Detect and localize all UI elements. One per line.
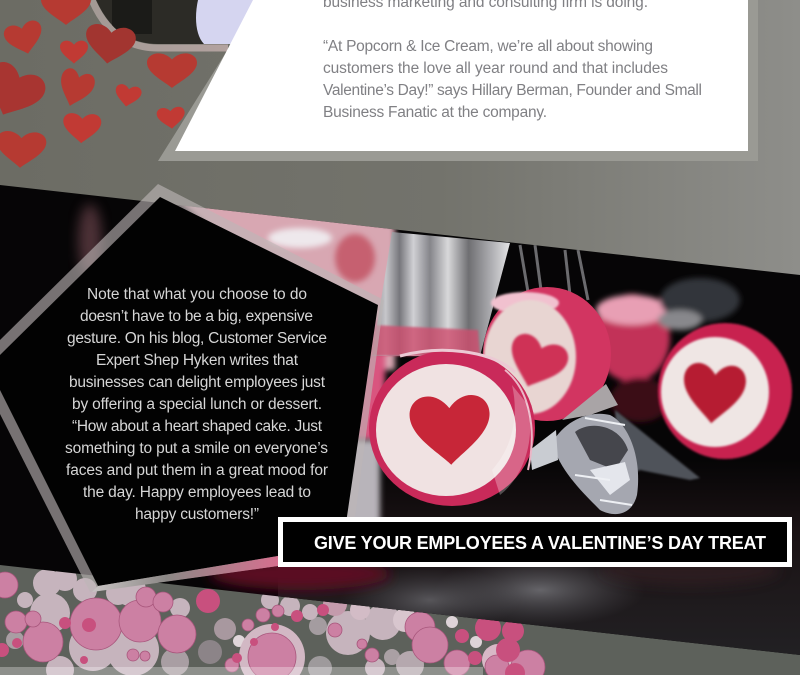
table surface (278, 489, 800, 655)
candy wrapper knot (530, 384, 700, 514)
blurred distant candy (594, 278, 740, 422)
body text: Note that what you choose to do (87, 286, 307, 303)
panel text: Business Fanatic at the company. (323, 104, 547, 121)
body text: Expert Shep Hyken writes that (96, 352, 299, 369)
body text: the day. Happy employees lead to (83, 484, 311, 501)
heart (113, 83, 142, 109)
banner heading: GIVE YOUR EMPLOYEES A VALENTINE’S DAY TREAT (314, 533, 766, 553)
pale strip along bottom (0, 667, 483, 675)
body text: “How about a heart shaped cake. Just (72, 418, 323, 435)
heart (60, 41, 88, 64)
body text: happy customers!” (135, 506, 259, 523)
glass jar (368, 232, 588, 356)
panel border (158, 0, 758, 161)
panel text: customers the love all year round and that includes (323, 60, 668, 77)
body text: by offering a special lunch or dessert. (72, 396, 322, 413)
body text: something to put a smile on everyone’s (65, 440, 328, 457)
right candy (658, 323, 792, 459)
dark pink bubbles (0, 589, 525, 675)
banner heading (278, 517, 792, 567)
table reflections (206, 566, 773, 620)
light bubbles (6, 567, 514, 675)
bubbles background (0, 555, 800, 675)
heart (62, 113, 102, 144)
heart (82, 23, 137, 67)
body text: businesses can delight employees just (69, 374, 326, 391)
blurred pink jar background (78, 190, 395, 525)
body text: faces and put them in a great mood for (66, 462, 328, 479)
body text (65, 286, 328, 523)
heart (2, 19, 47, 58)
heart (41, 0, 91, 25)
panel text (323, 0, 702, 121)
heart (0, 58, 50, 126)
black pentagon text panel (0, 197, 378, 592)
panel text: Valentine’s Day!” says Hillary Berman, Founder and Small (323, 82, 702, 99)
pink bubbles (0, 572, 545, 675)
inset photo of person (96, 0, 262, 44)
heart (147, 53, 197, 88)
body text: gesture. On his blog, Customer Service (67, 330, 327, 347)
heart (54, 66, 97, 111)
panel text: “At Popcorn & Ice Cream, we’re all about showing (323, 38, 653, 55)
curved photo border (92, 0, 228, 48)
pentagon lower border (92, 556, 278, 592)
heart (0, 130, 47, 169)
section: bubbles strip (0, 555, 800, 675)
front candy (369, 350, 535, 506)
hearts pattern (0, 0, 197, 169)
photo dark base (0, 180, 800, 660)
section: top photo, hearts and text panel (0, 0, 758, 169)
middle candy (483, 287, 611, 421)
heart (156, 106, 186, 130)
body text: doesn’t have to be a big, expensive (80, 308, 313, 325)
white text panel (175, 0, 748, 151)
pentagon border (0, 184, 384, 592)
section: candy photo band (0, 180, 800, 660)
